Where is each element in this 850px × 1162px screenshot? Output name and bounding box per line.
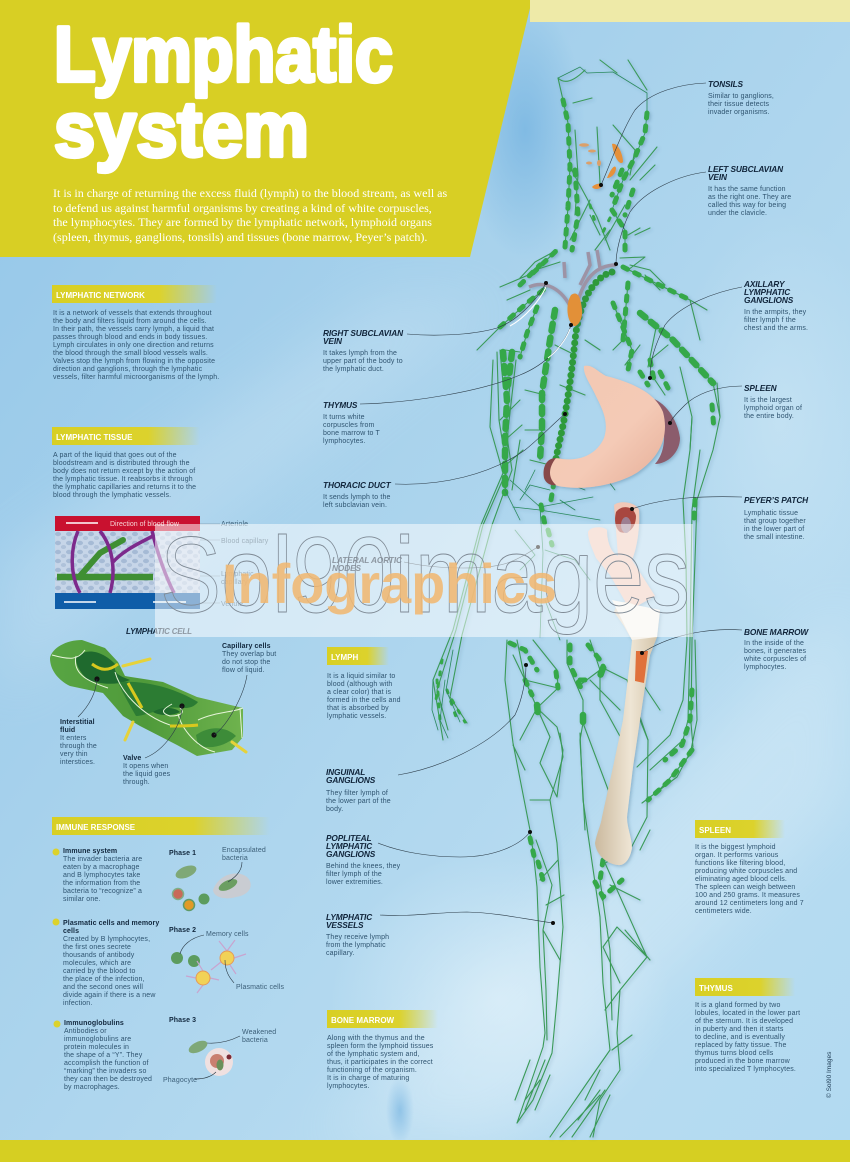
label: axillary lymphatic ganglions: GANGLIONS: [744, 295, 794, 305]
header panel: yellow: [0, 0, 532, 257]
body text: around 12 centimeters long and 7: [695, 900, 804, 907]
organs: [529, 143, 680, 865]
label: bone marrow: In the inside of the: [744, 640, 804, 647]
label: popliteal lymphatic ganglions: lower extremities.: [326, 879, 383, 886]
phase 2 diagram: Phase 2: [169, 927, 196, 934]
step 2: Plasmatic cells and memory: [63, 920, 159, 927]
label: lymphatic vessels: LYMPHATIC: [326, 912, 373, 922]
heading: [52, 427, 200, 445]
upper legs vessels and nodes: [505, 640, 660, 830]
phase 3 diagram: bacteria: [242, 1037, 268, 1044]
label: lymphatic vessels: from the lymphatic: [326, 942, 386, 949]
step 2: thousands of antibody: [63, 952, 135, 959]
vein: subclavian: [529, 250, 616, 310]
spleen: [650, 398, 680, 464]
phase 3 diagram: Phase 3: [169, 1017, 196, 1024]
label: popliteal lymphatic ganglions: LYMPHATIC: [326, 841, 373, 851]
label: interstitial fluid: It enters: [60, 735, 87, 742]
label: thoracic duct: THORACIC DUCT: [323, 480, 392, 490]
heading: SPLEEN: [699, 826, 731, 835]
label: thoracic duct: [323, 480, 392, 509]
panel: lymphatic network: [52, 285, 219, 381]
lymphatic body network: [432, 60, 720, 1137]
label: tonsils: TONSILS: [708, 79, 744, 89]
label: lymphatic vessels: capillary.: [326, 950, 355, 957]
bottom yellow band: [0, 1140, 850, 1162]
body text: blood (although with: [327, 681, 392, 688]
step 2: cells: [63, 928, 79, 935]
femur and bone marrow: [595, 600, 660, 865]
label: thymus: THYMUS: [323, 400, 358, 410]
right arm and hand: [637, 383, 720, 803]
body text: of the sternum. It is developed: [695, 1018, 793, 1025]
label: thoracic duct: It sends lymph to the: [323, 494, 391, 501]
step 1: the information from the: [63, 880, 140, 887]
heading: BONE MARROW: [331, 1016, 395, 1025]
label: spleen: SPLEEN: [744, 383, 778, 393]
label: capillary cells: do not stop the: [222, 659, 270, 666]
body text: body does not return except by the action of: [53, 468, 195, 475]
step 1: Immune system: [63, 848, 117, 855]
step 2: divide again if there is a new: [63, 992, 156, 999]
body text: It is the biggest lymphoid: [695, 844, 776, 851]
tissue labels: Arteriole: [221, 521, 248, 528]
stomach: [544, 366, 665, 488]
label: valve: Valve: [123, 755, 141, 762]
left arm and torso chain: [432, 350, 523, 740]
step 2: Created by B lymphocytes,: [63, 936, 150, 943]
body text: produced in the bone marrow: [695, 1058, 791, 1065]
step 1: bacteria to “recognize” a: [63, 888, 142, 895]
step 3: by macrophages.: [64, 1084, 120, 1091]
label: peyer's patch: [744, 495, 809, 541]
tissue labels: Lymphatic: [221, 571, 254, 578]
body text: passes through blood and ends in body tissues.: [53, 334, 207, 341]
label: lymphatic vessels: [326, 912, 389, 957]
phase 2 diagram: Plasmatic cells: [236, 984, 284, 991]
body text: In their path, the vessels carry lymph, a liquid that: [53, 326, 214, 333]
step 2: molecules, which are: [63, 960, 131, 967]
phase 1 diagram: [169, 847, 266, 910]
leader lines: [360, 83, 742, 923]
label: left subclavian vein: called this way for being: [708, 202, 786, 209]
body text: Valves stop the lymph from flowing in the opposite: [53, 358, 215, 365]
phase 3 diagram: Weakened: [242, 1029, 276, 1036]
label: right subclavian vein: RIGHT SUBCLAVIAN: [323, 328, 404, 338]
label: popliteal lymphatic ganglions: [326, 833, 401, 886]
phase 2 diagram: Memory cells: [206, 931, 249, 938]
body text: lymphocytes.: [327, 1083, 370, 1090]
label: left subclavian vein: LEFT SUBCLAVIAN: [708, 164, 784, 174]
body text: centimeters wide.: [695, 908, 752, 915]
step 3: immunoglobulins are: [64, 1036, 131, 1043]
tissue labels: Venule: [221, 601, 243, 608]
label: spleen: lymphoid organ of: [744, 405, 802, 412]
step 1: [52, 848, 142, 903]
body text: producing white corpuscles and: [695, 868, 797, 875]
heading: LYMPHATIC NETWORK: [56, 291, 145, 300]
watermark band: Infographics: [222, 552, 557, 615]
credit: © Sol90 Images: [825, 1051, 833, 1098]
intro text: the lymphocytes. They are formed by the lymphatic network, lymphoid organs: [53, 215, 432, 229]
label: axillary lymphatic ganglions: AXILLARY: [743, 279, 786, 289]
heading: LYMPH: [331, 653, 358, 662]
leader dots: [524, 183, 672, 925]
phase 3 diagram: Phagocyte: [163, 1077, 197, 1084]
body text: into specialized T lymphocytes.: [695, 1066, 796, 1073]
title: system: [54, 85, 309, 173]
label: inguinal ganglions: INGUINAL: [326, 767, 365, 777]
step 3: Immunoglobulins: [64, 1020, 124, 1027]
label: capillary cells: flow of liquid.: [222, 667, 265, 674]
tissue labels: Blood capillary: [221, 538, 269, 545]
phase 1 diagram: Phase 1: [169, 850, 196, 857]
body text: functioning of the organism.: [327, 1067, 417, 1074]
body text: lymphatic vessels.: [327, 713, 386, 720]
abdominal vessels: [505, 470, 615, 640]
label: capillary cells: They overlap but: [222, 651, 276, 658]
tissue diagram: [55, 516, 220, 609]
intro text: It is in charge of returning the excess fluid (lymph) to the blood stream, as well as: [53, 186, 448, 200]
body text: 100 and 250 grams. It measures: [695, 892, 800, 899]
body text: It is a gland formed by two: [695, 1002, 780, 1009]
label: spleen: It is the largest: [744, 397, 792, 404]
label: thymus: bone marrow to T: [323, 430, 381, 437]
label: inguinal ganglions: [326, 767, 391, 813]
body text: organ. It performs various: [695, 852, 779, 859]
heading: THYMUS: [699, 984, 733, 993]
label: thymus: It turns white: [323, 414, 365, 421]
label: right subclavian vein: It takes lymph from the: [323, 350, 397, 357]
body text: the lymphatic tissue. It reabsorbs it through: [53, 476, 193, 483]
body text: It is a network of vessels that extends throughout: [53, 310, 212, 317]
body text: eliminating aged blood cells.: [695, 876, 787, 883]
body text: to decline, and is eventually: [695, 1034, 785, 1041]
step 1: The invader bacteria are: [63, 856, 142, 863]
label: valve: It opens when: [123, 763, 168, 770]
step 1: similar one.: [63, 896, 100, 903]
label: axillary lymphatic ganglions: chest and the arms.: [744, 325, 808, 332]
step 3: protein molecules in: [64, 1044, 129, 1051]
label: popliteal lymphatic ganglions: GANGLIONS: [326, 849, 376, 859]
body text: Lymph circulates in only one direction and returns: [53, 342, 214, 349]
label: right subclavian vein: upper part of the body to: [323, 358, 403, 365]
body text: replaced by fatty tissue. The: [695, 1042, 786, 1049]
label: valve: through.: [123, 779, 150, 786]
step 2: infection.: [63, 1000, 92, 1007]
panel: lymphatic tissue: [52, 427, 270, 609]
body text: It is a liquid similar to: [327, 673, 395, 680]
label: capillary cells: Capillary cells: [222, 643, 271, 650]
label: interstitial fluid: [60, 719, 97, 766]
panel: thymus: [695, 978, 800, 1073]
label: thymus: lymphocytes.: [323, 438, 366, 445]
step 1: eaten by a macrophage: [63, 864, 140, 871]
panel: lymph: [327, 647, 401, 720]
label: inguinal ganglions: the lower part of the: [326, 798, 391, 805]
step 2: [52, 918, 159, 1007]
watermark band: Sol90images: [160, 514, 690, 635]
label: bone marrow: lymphocytes.: [744, 664, 787, 671]
top right pale strip: [530, 0, 850, 22]
label: axillary lymphatic ganglions: In the armpits, they: [744, 309, 807, 316]
intro text: to defend us against harmful organisms by creating a kind of white corpuscles,: [53, 201, 432, 215]
label: thymus: [323, 400, 381, 445]
label: spleen: the entire body.: [744, 413, 794, 420]
leader line highlights: [510, 287, 570, 358]
label: valve: the liquid goes: [123, 771, 171, 778]
label: tonsils: Similar to ganglions,: [708, 93, 774, 100]
step 3: Antibodies or: [64, 1028, 107, 1035]
intro text: (spleen, thymus, ganglions, tonsils) and tissues (bone marrow, Peyer’s patch).: [53, 230, 427, 244]
step 3: [54, 1020, 152, 1091]
body text: functions like filtering blood,: [695, 860, 785, 867]
label: right subclavian vein: the lymphatic duct.: [323, 366, 384, 373]
label: left subclavian vein: under the clavicle.: [708, 210, 767, 217]
heading: [52, 285, 217, 303]
label: left subclavian vein: as the right one. They are: [708, 194, 791, 201]
step 2: carried by the blood to: [63, 968, 136, 975]
label: bone marrow: white corpuscles of: [743, 656, 806, 663]
label: peyer's patch: the small intestine.: [744, 534, 805, 541]
step 3: the shape of a “Y”. They: [64, 1052, 143, 1059]
label: axillary lymphatic ganglions: filter lymph f the: [744, 317, 796, 324]
panel: bone marrow: [327, 1010, 438, 1090]
small intestine and appendix: [588, 502, 655, 610]
phase 1 diagram: bacteria: [222, 855, 248, 862]
label: valve: [123, 755, 171, 786]
phase 2 diagram: [169, 927, 284, 993]
label: capillary cells: [222, 643, 276, 674]
heading: [52, 817, 270, 835]
title: Lymphatic: [54, 10, 393, 98]
label: peyer's patch: that group together: [744, 518, 806, 525]
tissue labels: capillary: [221, 579, 248, 586]
body text: thus, it participates in the correct: [327, 1059, 433, 1066]
tonsils: [579, 143, 623, 189]
cell illustration: [50, 640, 247, 758]
body text: the blood through the small blood vessels walls.: [53, 350, 208, 357]
label: tonsils: invader organisms.: [708, 109, 770, 116]
step 2: the place of the infection,: [63, 976, 145, 983]
thymus: [567, 293, 582, 326]
panel: spleen: [695, 820, 804, 915]
body text: spleen form the lymphoid tissues: [327, 1043, 434, 1050]
body text: vessels, filter harmful microorganisms of the lymph.: [53, 374, 219, 381]
label: popliteal lymphatic ganglions: POPLITEAL: [326, 833, 372, 843]
label: interstitial fluid: through the: [60, 743, 97, 750]
step 3: they can then be destroyed: [64, 1076, 152, 1083]
label: left subclavian vein: VEIN: [708, 172, 728, 182]
body text: thymus turns blood cells: [695, 1050, 774, 1057]
body text: The spleen can weigh between: [695, 884, 795, 891]
label: thymus: corpuscles from: [323, 422, 375, 429]
body text: bloodstream and is distributed through the: [53, 460, 190, 467]
label: lateral aortic nodes: LATERAL AORTIC: [332, 555, 403, 565]
label: left subclavian vein: [708, 164, 791, 217]
label: right subclavian vein: VEIN: [323, 336, 343, 346]
label: peyer's patch: PEYER’S PATCH: [744, 495, 809, 505]
cell title: LYMPHATIC CELL: [126, 627, 192, 636]
body text: lobules, located in the lower part: [695, 1010, 800, 1017]
label: lateral aortic nodes: NODES: [332, 563, 361, 573]
step 3: accomplish the function of: [64, 1060, 149, 1067]
label: interstitial fluid: fluid: [60, 727, 75, 734]
label: axillary lymphatic ganglions: [743, 279, 808, 332]
label: axillary lymphatic ganglions: LYMPHATIC: [744, 287, 791, 297]
body text: direction and ganglions, through the lymphatic: [53, 366, 203, 373]
label: inguinal ganglions: body.: [326, 806, 343, 813]
step 1: and B lymphocytes take: [63, 872, 140, 879]
label: tonsils: their tissue detects: [708, 101, 770, 108]
step 2: and the second ones will: [63, 984, 143, 991]
panel: lymphatic cell: [50, 627, 276, 786]
shoulders and chest vessels: [477, 250, 720, 465]
label: interstitial fluid: very thin: [60, 751, 88, 758]
label: right subclavian vein: [323, 328, 404, 373]
panel: immune response: [52, 817, 284, 1091]
body text: in puberty and then it starts: [695, 1026, 784, 1033]
body text: a clear color) that is: [327, 689, 392, 696]
label: interstitial fluid: interstices.: [60, 759, 95, 766]
body text: of the lymphatic system and,: [327, 1051, 420, 1058]
label: spleen: [744, 383, 802, 420]
label: bone marrow: bones, it generates: [744, 648, 807, 655]
step 2: the first ones secrete: [63, 944, 131, 951]
label: tonsils: [708, 79, 774, 116]
label: bone marrow: BONE MARROW: [744, 627, 809, 637]
label: left subclavian vein: It has the same function: [708, 186, 786, 193]
body text: Along with the thymus and the: [327, 1035, 425, 1042]
body text: that is absorbed by: [327, 705, 389, 712]
label: lymphatic vessels: VESSELS: [326, 920, 364, 930]
heading: IMMUNE RESPONSE: [56, 823, 136, 832]
label: thoracic duct: left subclavian vein.: [323, 502, 387, 509]
body text: blood through the lymphatic vessels.: [53, 492, 171, 499]
heading: LYMPHATIC TISSUE: [56, 433, 133, 442]
label: lymphatic vessels: They receive lymph: [326, 934, 389, 941]
head and neck vessels: [558, 60, 657, 250]
step 3: “marking” the invaders so: [64, 1068, 146, 1075]
label: peyer's patch: Lymphatic tissue: [744, 510, 798, 517]
label: popliteal lymphatic ganglions: filter lymph of the: [326, 871, 382, 878]
title: [54, 10, 393, 173]
phase 3 diagram: [163, 1017, 276, 1084]
label: bone marrow: [743, 627, 809, 671]
body text: the body and filters liquid from around the cells.: [53, 318, 207, 325]
label: inguinal ganglions: They filter lymph of: [326, 790, 388, 797]
body text: the lymphatic capillaries and returns it to the: [53, 484, 196, 491]
label: popliteal lymphatic ganglions: Behind the knees, they: [326, 863, 401, 870]
thoracic duct: [553, 272, 612, 482]
body text: formed in the cells and: [327, 697, 401, 704]
label: interstitial fluid: Interstitial: [60, 719, 95, 726]
tissue diagram: Direction of blood flow: [110, 521, 180, 528]
label: peyer's patch: in the lower part of: [744, 526, 804, 533]
phase 1 diagram: Encapsulated: [222, 847, 266, 854]
body text: A part of the liquid that goes out of the: [53, 452, 177, 459]
body text: It is in charge of maturing: [327, 1075, 409, 1082]
lower legs and feet vessels: [515, 717, 650, 1137]
label: inguinal ganglions: GANGLIONS: [326, 775, 376, 785]
